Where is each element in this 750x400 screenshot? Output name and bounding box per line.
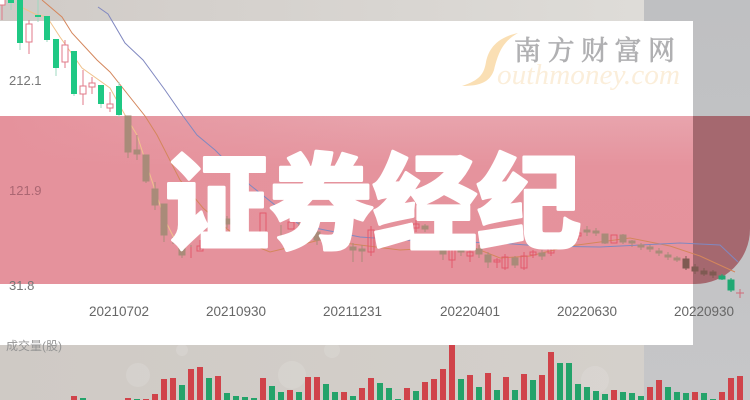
x axis date labels: 20211231 <box>323 304 382 319</box>
pink title band <box>0 116 750 284</box>
hollow red candles in band <box>191 213 617 270</box>
x axis date labels: 20220401 <box>440 304 500 319</box>
final candles <box>719 274 734 292</box>
x axis date labels: 20220930 <box>674 304 734 319</box>
moving average lines <box>23 0 738 272</box>
y axis labels: 121.9 <box>9 183 42 198</box>
x axis date labels: 20210930 <box>206 304 266 319</box>
x axis date labels: 20210702 <box>89 304 149 319</box>
hollow red candles above band <box>0 0 113 112</box>
volume bars: red <box>71 345 743 400</box>
brown candles in band <box>125 116 680 268</box>
volume label: 成交量(股) <box>6 338 62 353</box>
x axis date labels <box>89 304 734 319</box>
candlesticks <box>0 0 744 298</box>
candles on dark right corner <box>683 256 716 278</box>
y axis labels: 212.1 <box>9 73 42 88</box>
logo: southmoney: outhmoney.com <box>497 60 680 91</box>
y axis labels: 31.8 <box>9 278 34 293</box>
y axis labels <box>9 73 42 293</box>
title: 证券经纪 <box>165 148 581 264</box>
green candles above band <box>8 0 122 117</box>
logo: southmoney: 南方财富网 <box>514 29 682 68</box>
white chart panel <box>0 21 693 345</box>
x axis date labels: 20220630 <box>557 304 617 319</box>
volume bars: green <box>80 363 716 400</box>
logo: southmoney <box>462 29 682 91</box>
